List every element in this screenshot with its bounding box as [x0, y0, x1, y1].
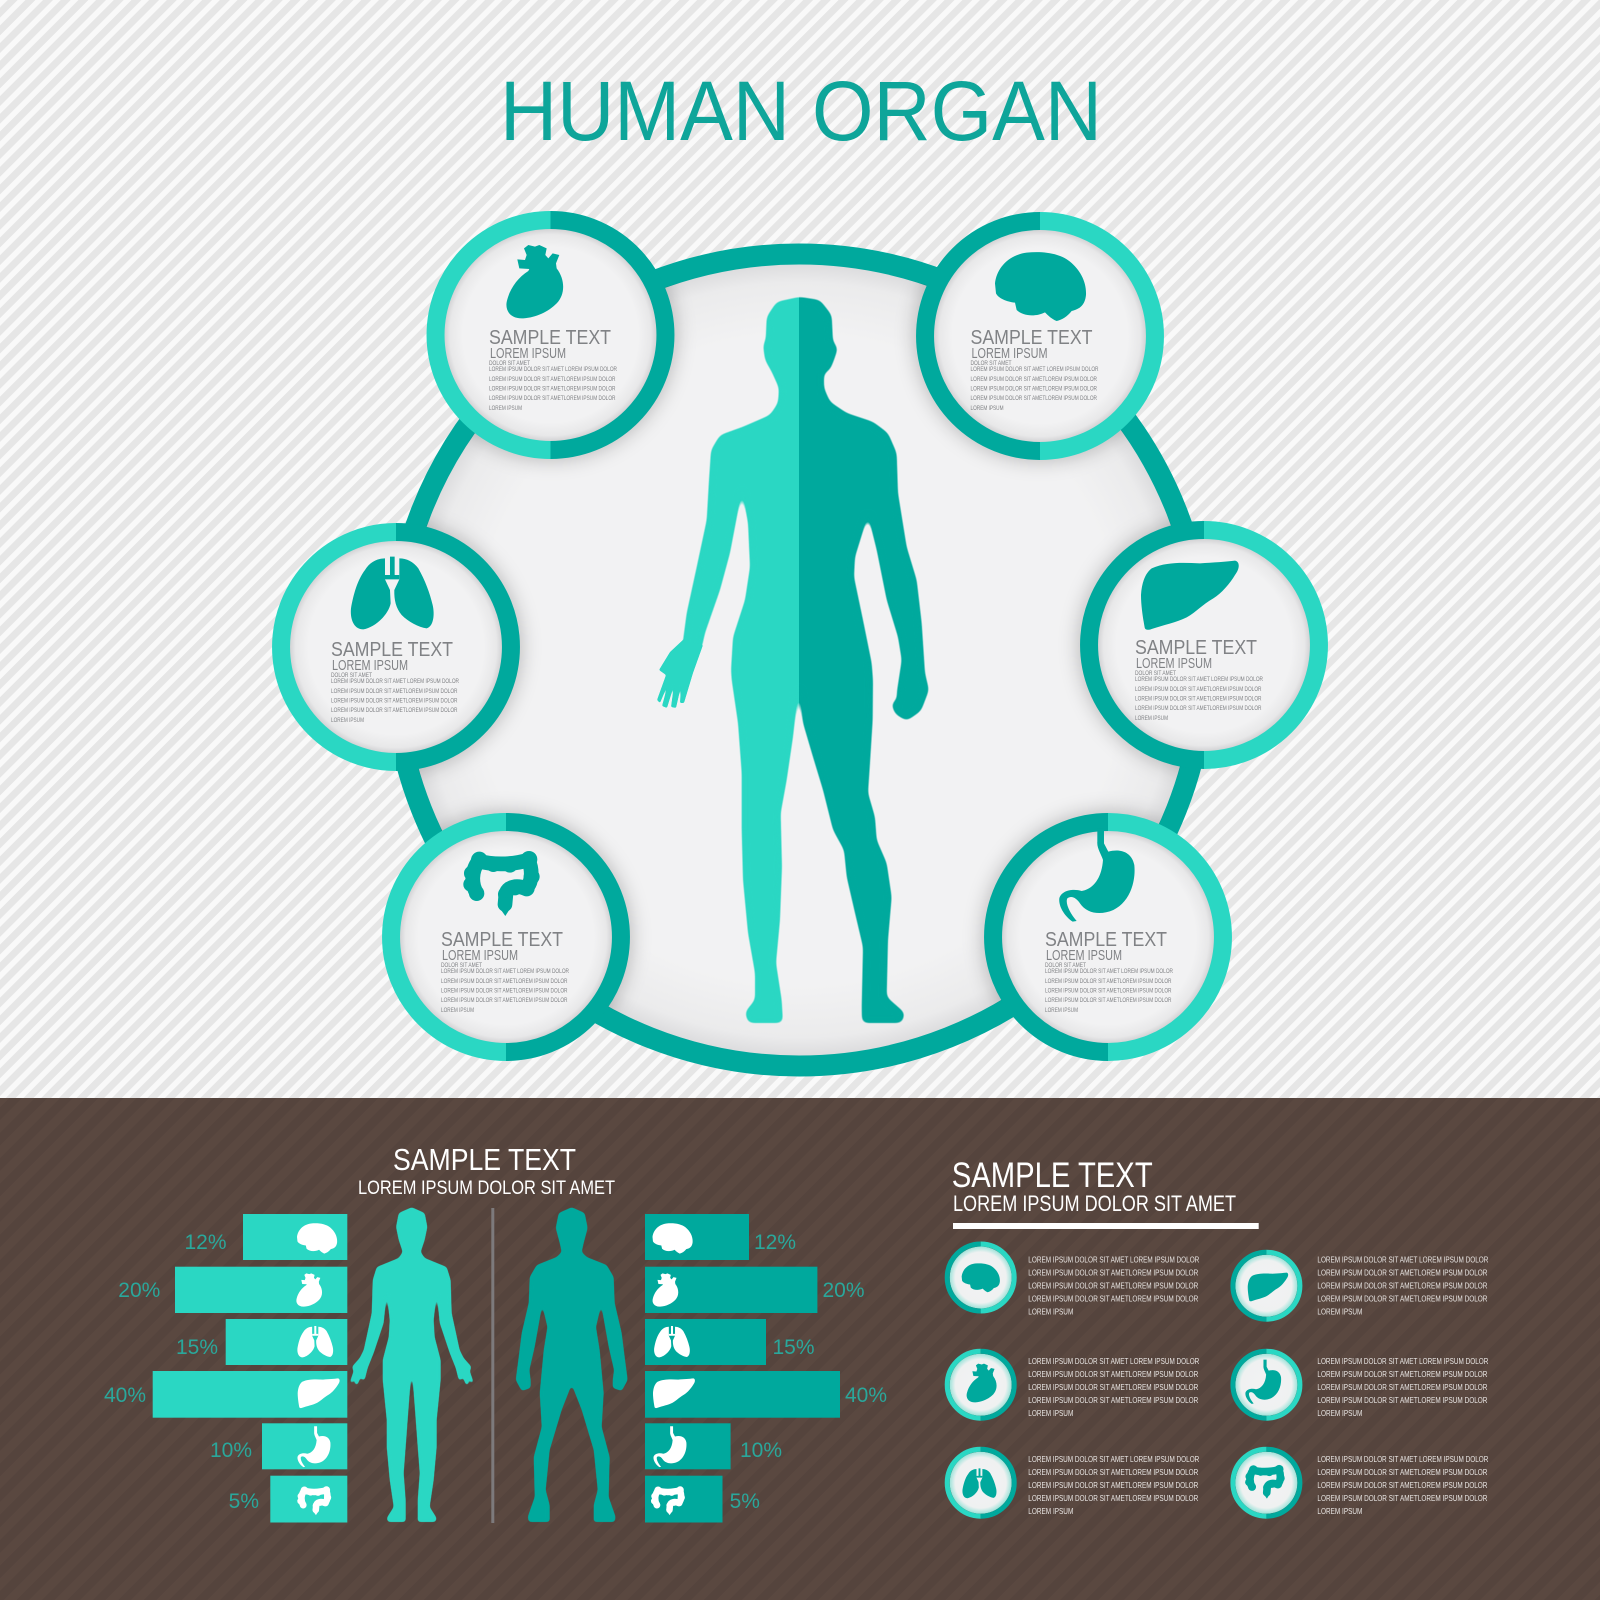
panel: heart circle — [436, 220, 665, 450]
lungs circle text: LOREM IPSUM — [332, 658, 408, 674]
brain description: LOREM IPSUM DOLOR SIT AMET LOREM IPSUM DOLOR — [1028, 1255, 1199, 1264]
colon ring — [391, 822, 621, 1052]
stomach badge — [1233, 1351, 1300, 1418]
figure: light female silhouette — [350, 1207, 474, 1522]
panel: organ list heading — [952, 1156, 1259, 1229]
colon description: LOREM IPSUM DOLOR SIT AMETLOREM IPSUM DOLOR — [1317, 1481, 1488, 1490]
brain circle text: SAMPLE TEXT — [970, 327, 1092, 349]
heart circle text: LOREM IPSUM — [490, 346, 566, 362]
list item: brain — [947, 1244, 1199, 1316]
lungs description: LOREM IPSUM DOLOR SIT AMETLOREM IPSUM DOLOR — [1028, 1481, 1198, 1490]
brain description: LOREM IPSUM DOLOR SIT AMETLOREM IPSUM DOLOR — [1028, 1268, 1198, 1277]
liver circle text: LOREM IPSUM DOLOR SIT AMETLOREM IPSUM DOLOR — [1135, 696, 1262, 702]
icon: heart — [506, 245, 563, 318]
lungs circle text: LOREM IPSUM DOLOR SIT AMETLOREM IPSUM DOLOR — [331, 688, 458, 695]
bar: colon 5% left — [229, 1476, 347, 1522]
panel: comparison chart heading — [358, 1142, 615, 1199]
bar: colon 5% right: 5% — [730, 1490, 760, 1513]
title: HUMAN ORGAN — [500, 64, 1102, 158]
stomach circle text: SAMPLE TEXT — [1045, 929, 1167, 951]
background: striped light area — [0, 0, 1600, 1098]
bar: liver 40% right — [645, 1371, 887, 1418]
stomach ring — [993, 822, 1223, 1052]
heart description — [1028, 1357, 1199, 1418]
heart circle text: DOLOR SIT AMET — [489, 360, 530, 367]
lungs circle text: LOREM IPSUM DOLOR SIT AMETLOREM IPSUM DOLOR — [331, 707, 458, 714]
colon circle text: LOREM IPSUM DOLOR SIT AMETLOREM IPSUM DOLOR — [441, 978, 568, 985]
colon circle text: LOREM IPSUM DOLOR SIT AMET LOREM IPSUM DOLOR — [441, 968, 569, 975]
bar: stomach 10% left: 10% — [210, 1439, 252, 1462]
stomach description: LOREM IPSUM DOLOR SIT AMET LOREM IPSUM DOLOR — [1317, 1357, 1489, 1366]
brain description: LOREM IPSUM — [1028, 1307, 1074, 1316]
stomach circle text: DOLOR SIT AMET — [1045, 962, 1086, 969]
heart ring — [436, 220, 665, 450]
heart badge — [947, 1351, 1014, 1418]
stomach circle text — [1045, 929, 1173, 1014]
bar: brain 12% right: 12% — [754, 1231, 796, 1254]
liver circle text: DOLOR SIT AMET — [1135, 670, 1176, 677]
liver badge — [1233, 1252, 1300, 1319]
lungs description — [1028, 1455, 1199, 1516]
chart: left bars — [104, 1214, 347, 1522]
icon: stomach — [1059, 828, 1135, 922]
icon: lungs — [351, 557, 434, 629]
panel: organ list heading: LOREM IPSUM DOLOR SIT AMET — [953, 1191, 1236, 1216]
liver description: LOREM IPSUM DOLOR SIT AMETLOREM IPSUM DOLOR — [1317, 1294, 1488, 1303]
bar: colon 5% right — [645, 1476, 760, 1522]
stomach circle text: LOREM IPSUM — [1046, 948, 1122, 964]
list item: colon — [1233, 1449, 1489, 1516]
human body split silhouette — [657, 297, 929, 1023]
list item: liver — [1233, 1252, 1489, 1319]
stomach description: LOREM IPSUM — [1317, 1409, 1363, 1418]
lungs circle text: LOREM IPSUM — [331, 717, 364, 724]
icon: small stomach — [1245, 1360, 1281, 1404]
bar: heart 20% left — [118, 1267, 347, 1313]
colon circle text: LOREM IPSUM DOLOR SIT AMETLOREM IPSUM DOLOR — [441, 997, 568, 1004]
colon description: LOREM IPSUM DOLOR SIT AMETLOREM IPSUM DOLOR — [1317, 1468, 1488, 1477]
brain circle text: LOREM IPSUM — [972, 346, 1048, 362]
divider between figures — [491, 1208, 494, 1523]
bar: heart 20% right: 20% — [822, 1279, 865, 1302]
brain description: LOREM IPSUM DOLOR SIT AMETLOREM IPSUM DOLOR — [1028, 1281, 1198, 1290]
icon: small heart — [967, 1364, 997, 1402]
colon circle text — [441, 929, 569, 1014]
heart circle text: LOREM IPSUM DOLOR SIT AMET LOREM IPSUM DOLOR — [489, 366, 617, 373]
list item: lungs — [947, 1449, 1199, 1516]
icon: brain — [995, 252, 1086, 321]
heart description: LOREM IPSUM DOLOR SIT AMETLOREM IPSUM DOLOR — [1028, 1396, 1198, 1405]
icon: small lungs — [962, 1468, 996, 1498]
heart description: LOREM IPSUM DOLOR SIT AMETLOREM IPSUM DOLOR — [1028, 1370, 1198, 1379]
brain badge — [947, 1244, 1014, 1311]
liver description: LOREM IPSUM — [1317, 1307, 1363, 1316]
heart circle text: LOREM IPSUM — [489, 405, 522, 412]
icon: small brain — [962, 1263, 1000, 1292]
heart description: LOREM IPSUM DOLOR SIT AMET LOREM IPSUM DOLOR — [1028, 1357, 1199, 1366]
bar: lungs 15% left — [176, 1319, 347, 1365]
stomach description: LOREM IPSUM DOLOR SIT AMETLOREM IPSUM DOLOR — [1317, 1383, 1488, 1392]
heart description: LOREM IPSUM DOLOR SIT AMETLOREM IPSUM DOLOR — [1028, 1383, 1198, 1392]
stomach circle text: LOREM IPSUM DOLOR SIT AMETLOREM IPSUM DOLOR — [1045, 978, 1172, 985]
panel: comparison chart heading: LOREM IPSUM DOLOR SIT AMET — [358, 1178, 615, 1199]
colon circle text: SAMPLE TEXT — [441, 929, 563, 951]
panel: colon circle — [391, 822, 621, 1052]
bar: liver 40% left: 40% — [104, 1384, 146, 1407]
liver circle text: LOREM IPSUM DOLOR SIT AMETLOREM IPSUM DOLOR — [1135, 686, 1262, 693]
lungs circle text — [331, 639, 459, 724]
lungs ring — [281, 532, 511, 762]
bar: brain 12% left: 12% — [184, 1231, 226, 1254]
brain circle text — [970, 327, 1099, 412]
liver circle text: SAMPLE TEXT — [1135, 637, 1257, 659]
chart: right bars — [645, 1214, 887, 1522]
colon circle text: DOLOR SIT AMET — [441, 962, 482, 969]
brain circle text: LOREM IPSUM — [970, 405, 1004, 412]
liver circle text: LOREM IPSUM DOLOR SIT AMETLOREM IPSUM DOLOR — [1135, 705, 1262, 712]
lungs description: LOREM IPSUM DOLOR SIT AMETLOREM IPSUM DOLOR — [1028, 1468, 1198, 1477]
stomach description: LOREM IPSUM DOLOR SIT AMETLOREM IPSUM DOLOR — [1317, 1396, 1488, 1405]
colon description — [1317, 1455, 1489, 1516]
stomach circle text: LOREM IPSUM DOLOR SIT AMET LOREM IPSUM DOLOR — [1045, 968, 1173, 975]
bar: liver 40% left — [104, 1371, 347, 1418]
stomach circle text: LOREM IPSUM DOLOR SIT AMETLOREM IPSUM DOLOR — [1045, 988, 1172, 994]
stomach circle text: LOREM IPSUM DOLOR SIT AMETLOREM IPSUM DOLOR — [1045, 997, 1172, 1004]
heart circle text — [489, 327, 617, 412]
panel: liver circle — [1089, 530, 1319, 760]
panel: brain circle — [925, 221, 1155, 451]
colon circle text: LOREM IPSUM — [442, 948, 518, 964]
bar: colon 5% left: 5% — [229, 1490, 259, 1513]
lungs description: LOREM IPSUM — [1028, 1507, 1074, 1516]
body: light left half — [657, 296, 799, 1024]
heart description: LOREM IPSUM — [1028, 1409, 1074, 1418]
icon: small liver — [1248, 1273, 1288, 1301]
bar: stomach 10% right — [645, 1423, 782, 1469]
big central disc — [393, 254, 1205, 1066]
liver circle text: LOREM IPSUM — [1136, 656, 1212, 672]
body: dark right half — [799, 296, 929, 1024]
bar: heart 20% right — [645, 1267, 865, 1313]
panel: organ list heading: SAMPLE TEXT — [952, 1156, 1153, 1195]
bar: stomach 10% left — [210, 1423, 347, 1469]
liver circle text: LOREM IPSUM — [1135, 715, 1168, 722]
liver description: LOREM IPSUM DOLOR SIT AMETLOREM IPSUM DOLOR — [1317, 1268, 1488, 1277]
bar: lungs 15% left: 15% — [176, 1336, 218, 1359]
colon circle text: LOREM IPSUM — [441, 1007, 474, 1014]
liver description: LOREM IPSUM DOLOR SIT AMETLOREM IPSUM DOLOR — [1317, 1281, 1488, 1290]
brain ring — [925, 221, 1155, 451]
colon description: LOREM IPSUM — [1317, 1507, 1363, 1516]
liver ring — [1089, 530, 1319, 760]
brain circle text: DOLOR SIT AMET — [970, 360, 1012, 367]
lungs description: LOREM IPSUM DOLOR SIT AMETLOREM IPSUM DOLOR — [1028, 1494, 1198, 1503]
brain circle text: LOREM IPSUM DOLOR SIT AMETLOREM IPSUM DOLOR — [970, 386, 1097, 392]
heart circle text: SAMPLE TEXT — [489, 327, 611, 349]
lungs circle text: SAMPLE TEXT — [331, 639, 453, 661]
figure: dark male silhouette — [516, 1207, 628, 1522]
stomach circle text: LOREM IPSUM — [1045, 1007, 1078, 1014]
brain description — [1028, 1255, 1199, 1316]
liver circle text — [1135, 637, 1263, 722]
brain circle text: LOREM IPSUM DOLOR SIT AMETLOREM IPSUM DOLOR — [970, 395, 1097, 402]
colon circle text: LOREM IPSUM DOLOR SIT AMETLOREM IPSUM DOLOR — [441, 988, 568, 994]
stomach description: LOREM IPSUM DOLOR SIT AMETLOREM IPSUM DOLOR — [1317, 1370, 1488, 1379]
bar: brain 12% right — [645, 1214, 796, 1260]
panel: stomach circle — [993, 822, 1223, 1052]
bar: heart 20% left: 20% — [118, 1279, 160, 1302]
colon badge — [1233, 1449, 1300, 1516]
heart circle text: LOREM IPSUM DOLOR SIT AMETLOREM IPSUM DOLOR — [489, 386, 616, 392]
lungs circle text: LOREM IPSUM DOLOR SIT AMETLOREM IPSUM DOLOR — [331, 698, 458, 704]
soft shadows cast on the disc by the small circles — [418, 282, 1180, 1012]
colon description: LOREM IPSUM DOLOR SIT AMET LOREM IPSUM DOLOR — [1317, 1455, 1489, 1464]
colon description: LOREM IPSUM DOLOR SIT AMETLOREM IPSUM DOLOR — [1317, 1494, 1488, 1503]
heart circle text: LOREM IPSUM DOLOR SIT AMETLOREM IPSUM DOLOR — [489, 395, 616, 402]
bar: liver 40% right: 40% — [845, 1384, 887, 1407]
list item: stomach — [1233, 1351, 1489, 1418]
bar: stomach 10% right: 10% — [740, 1439, 782, 1462]
lungs description: LOREM IPSUM DOLOR SIT AMET LOREM IPSUM DOLOR — [1028, 1455, 1199, 1464]
panel: comparison chart heading: SAMPLE TEXT — [393, 1142, 576, 1177]
list item: heart — [947, 1351, 1199, 1418]
lungs circle text: DOLOR SIT AMET — [331, 672, 372, 679]
brain description: LOREM IPSUM DOLOR SIT AMETLOREM IPSUM DOLOR — [1028, 1294, 1198, 1303]
liver description: LOREM IPSUM DOLOR SIT AMET LOREM IPSUM DOLOR — [1317, 1255, 1489, 1264]
lungs circle text: LOREM IPSUM DOLOR SIT AMET LOREM IPSUM DOLOR — [331, 678, 459, 685]
bar: lungs 15% right — [645, 1319, 815, 1365]
heart circle text: LOREM IPSUM DOLOR SIT AMETLOREM IPSUM DOLOR — [489, 376, 616, 383]
brain circle text: LOREM IPSUM DOLOR SIT AMETLOREM IPSUM DOLOR — [970, 376, 1097, 383]
background: brown band — [0, 1098, 1600, 1600]
brain circle text: LOREM IPSUM DOLOR SIT AMET LOREM IPSUM DOLOR — [970, 366, 1099, 373]
stomach description — [1317, 1357, 1489, 1418]
liver description — [1317, 1255, 1489, 1316]
icon: small colon — [1245, 1465, 1285, 1499]
lungs badge — [947, 1449, 1014, 1516]
bar: brain 12% left — [184, 1214, 347, 1260]
panel: lungs circle — [281, 532, 511, 762]
icon: liver — [1141, 561, 1239, 630]
icon: colon — [463, 851, 540, 916]
liver circle text: LOREM IPSUM DOLOR SIT AMET LOREM IPSUM DOLOR — [1135, 676, 1263, 683]
bar: lungs 15% right: 15% — [772, 1336, 815, 1359]
